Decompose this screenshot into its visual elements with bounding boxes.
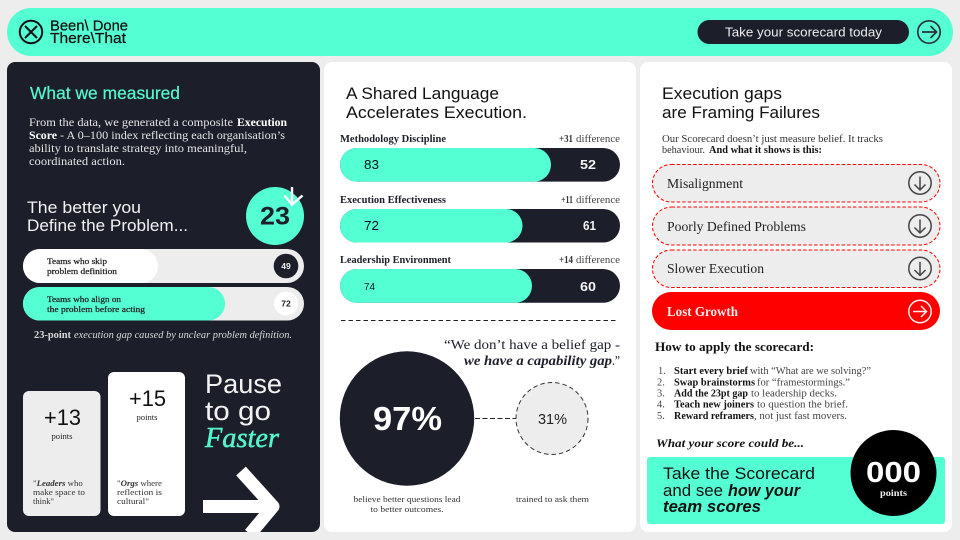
card: plus 15 points: +15 [129, 386, 166, 411]
list: how to apply steps: with “What are we solving?” [750, 366, 871, 377]
heading: pause to go faster: Faster [204, 423, 279, 454]
bar: teams who align on the problem: Teams who align on [47, 294, 122, 304]
heading: execution gaps: are Framing Failures [662, 103, 820, 122]
header call to action button [698, 20, 909, 44]
icon: down arrow [909, 257, 931, 280]
text block: execution score definition: Execution [237, 117, 288, 129]
list: how to apply steps [657, 366, 871, 422]
panel: execution gaps [640, 62, 952, 532]
caption: 23-point gap: 23-point [34, 330, 72, 341]
heading: shared language: Accelerates Execution. [346, 103, 527, 122]
bar: leadership environment [340, 255, 620, 303]
callout: take the scorecard: team scores [663, 497, 761, 516]
bar: methodology discipline: Methodology Discipline [340, 134, 446, 145]
bar: methodology discipline [340, 134, 620, 182]
heading: execution gaps [662, 84, 820, 122]
bar: execution effectiveness: 61 [583, 218, 596, 233]
bar: methodology discipline: 83 [364, 157, 379, 172]
bar: leadership environment: +14 [559, 255, 573, 266]
bar: teams who skip problem definition: Teams who skip [47, 256, 108, 266]
score badge: 000 points: 000 [866, 457, 921, 489]
list: how to apply steps: Teach new joiners [674, 400, 754, 410]
bar: methodology discipline: difference [576, 134, 620, 145]
header bar [7, 8, 953, 56]
caption: believe better questions: believe better questions lead [354, 494, 461, 504]
icon: down arrow [909, 172, 931, 194]
card: plus 13 points [23, 391, 100, 516]
quote: capability gap: “We don’t have a belief gap - [444, 338, 620, 353]
bar: teams who skip problem definition: problem definition [47, 266, 118, 276]
heading: shared language: A Shared Language [346, 84, 499, 103]
heading: the better you define the problem [27, 198, 188, 235]
card: plus 15 points: points [136, 412, 158, 422]
bar: methodology discipline: 52 [580, 157, 596, 172]
text block: scorecard intro: Our Scorecard doesn’t just measure belief. It tracks [662, 134, 883, 145]
list: how to apply steps: 5. [657, 411, 665, 422]
card: plus 15 points [108, 372, 185, 516]
list: how to apply steps: to question the brief. [757, 400, 848, 410]
pill: slower execution [652, 250, 940, 288]
callout: take the scorecard: and see [663, 481, 723, 500]
heading: what your score could be: What your score could be... [656, 436, 804, 450]
pill: misalignment [652, 164, 940, 202]
card: plus 13 points: make space to [33, 487, 86, 497]
bar: leadership environment: 60 [580, 279, 596, 294]
heading: the better you define the problem: Define the Problem... [27, 216, 188, 235]
logo: There\That [50, 31, 126, 47]
quote: capability gap [444, 338, 620, 369]
bar: execution effectiveness: Execution Effectiveness [340, 195, 446, 206]
stat circle: 31% [516, 382, 588, 454]
list: how to apply steps: Reward reframers [674, 411, 754, 422]
bar: leadership environment: difference [576, 255, 620, 266]
heading: execution gaps: Execution gaps [662, 84, 782, 103]
quote: capability gap: we have a capability gap [464, 354, 612, 369]
heading: pause to go faster: to go [205, 396, 271, 426]
score badge: 000 points: points [880, 489, 907, 499]
stat circle: 97%: 97% [373, 400, 442, 437]
caption: trained to ask them: trained to ask them [516, 494, 589, 504]
pill: slower execution: Slower Execution [667, 261, 764, 276]
card: plus 15 points: "Orgs where [117, 478, 162, 488]
heading: pause to go faster: Pause [205, 369, 282, 399]
pill: lost growth [652, 292, 940, 330]
card: plus 15 points: cultural" [117, 496, 149, 506]
card: plus 13 points: +13 [44, 405, 81, 430]
callout: take the scorecard: Take the Scorecard [663, 464, 815, 483]
pill: poorly defined problems: Poorly Defined Problems [667, 219, 806, 234]
text block: execution score definition [29, 117, 288, 168]
text block: scorecard intro: And what it shows is this: [709, 145, 822, 156]
pill: misalignment: Misalignment [667, 176, 743, 191]
caption: believe better questions: to better outcomes. [370, 504, 444, 514]
list: how to apply steps: to leadership decks. [751, 388, 837, 400]
bar: teams who align on the problem: the problem before acting [47, 304, 146, 314]
connector: dashed line [475, 418, 516, 420]
text block: execution score definition: ability to translate strategy into meaningful, [29, 143, 247, 155]
list: how to apply steps: 3. [657, 388, 665, 400]
score badge: 000 points [850, 430, 936, 516]
text block: execution score definition: Score [29, 130, 57, 142]
heading: shared language [346, 84, 527, 122]
bar: execution effectiveness [340, 195, 620, 242]
stat circle: 97% [340, 351, 474, 486]
panel: shared language [324, 62, 636, 532]
card: plus 13 points: think" [33, 496, 54, 506]
quote: capability gap: .” [612, 354, 620, 369]
text block: execution score definition: From the data, we generated a composite [29, 117, 233, 129]
list: how to apply steps: 2. [657, 378, 665, 388]
panel: what we measured [7, 62, 320, 534]
callout: take the scorecard [647, 457, 945, 524]
callout: take the scorecard: how your [728, 481, 801, 500]
heading: how to apply: How to apply the scorecard: [655, 340, 814, 354]
pill: poorly defined problems [652, 207, 940, 245]
caption: 23-point gap: execution gap caused by unclear problem definition. [74, 330, 292, 341]
bar: leadership environment: 74 [364, 281, 375, 293]
card: plus 15 points: reflection is [117, 487, 163, 497]
text block: scorecard intro: behaviour. [662, 145, 705, 156]
text block: execution score definition: - A 0–100 index reflecting each organisation’s [60, 130, 285, 142]
list: how to apply steps: Add the 23pt gap [674, 388, 748, 400]
list: how to apply steps: 1. [658, 366, 666, 377]
stat badge: 23 point gap: 23 [260, 202, 290, 230]
caption: believe better questions [354, 494, 461, 514]
card: plus 13 points: "Leaders who [33, 478, 83, 488]
logo: Been\ Done [50, 19, 128, 35]
heading: what we measured: What we measured [30, 83, 180, 103]
icon: header arrow [918, 21, 940, 43]
arrow: large white [203, 471, 273, 534]
list: how to apply steps: Start every brief [674, 366, 749, 377]
bar: leadership environment: Leadership Environment [340, 255, 452, 266]
bar: teams who align on the problem [23, 287, 304, 320]
bar: teams who align on the problem: 72 [281, 298, 291, 308]
bar: teams who skip problem definition [23, 249, 304, 283]
pill: lost growth: Lost Growth [667, 304, 738, 319]
list: how to apply steps: for “framestormings.” [757, 378, 850, 388]
icon: down arrow [909, 215, 931, 237]
bar: execution effectiveness: 72 [364, 218, 379, 233]
stat circle: 31%: 31% [538, 412, 567, 428]
icon: right arrow [909, 300, 931, 323]
header call to action button: Take your scorecard today [725, 25, 883, 40]
list: how to apply steps: , not just fast movers. [754, 411, 847, 422]
bar: teams who skip problem definition: 49 [281, 261, 291, 271]
text block: execution score definition: coordinated action. [29, 156, 125, 168]
bar: execution effectiveness: +11 [561, 195, 573, 206]
bar: execution effectiveness: difference [576, 195, 620, 206]
list: how to apply steps: 4. [657, 400, 665, 410]
logo [20, 19, 128, 47]
bar: methodology discipline: +31 [559, 134, 573, 145]
card: plus 13 points: points [51, 431, 73, 441]
heading: the better you define the problem: The better you [27, 198, 141, 217]
list: how to apply steps: Swap brainstorms [674, 378, 755, 388]
stat badge: 23 point gap [246, 187, 304, 245]
text block: scorecard intro [662, 134, 883, 156]
heading: pause to go faster [204, 369, 282, 454]
